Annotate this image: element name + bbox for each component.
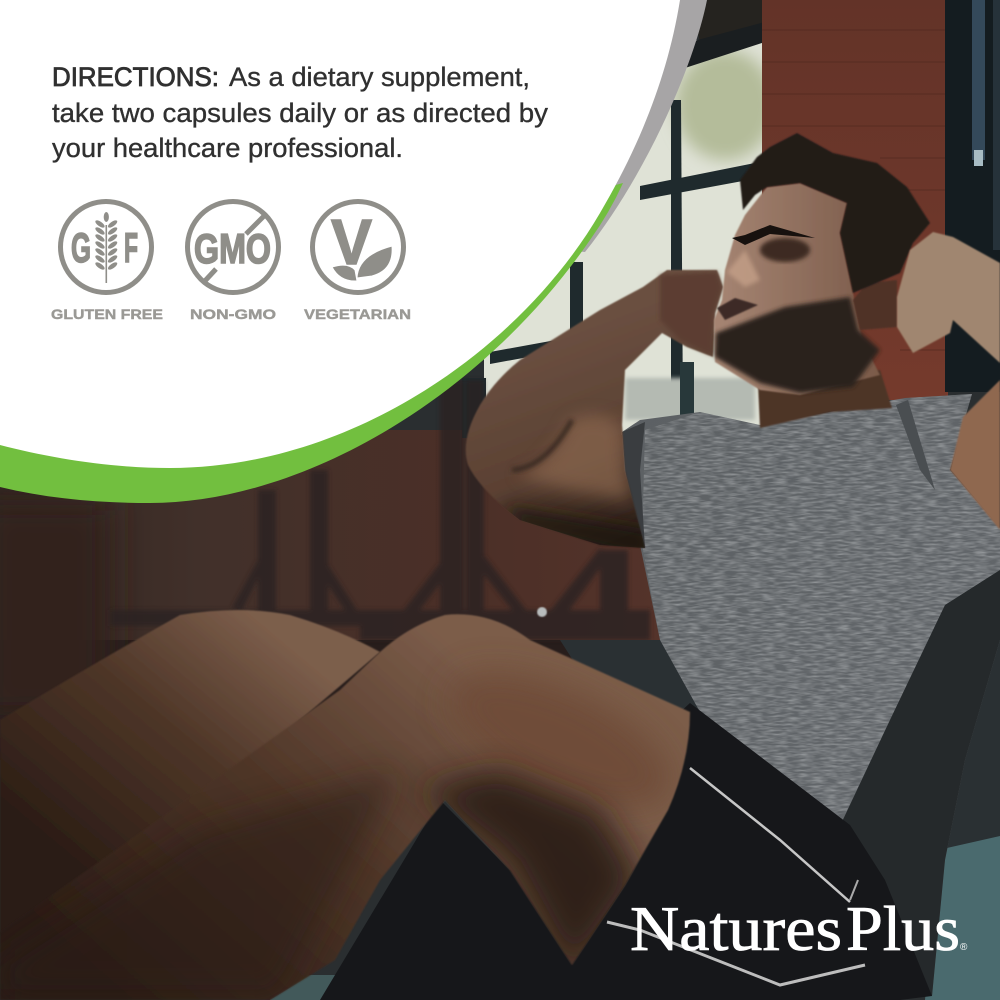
front leg: [0, 614, 690, 1000]
man: shirt: [622, 394, 1000, 996]
icon: gluten free: [60, 202, 152, 292]
man: right hand and forearm: [897, 232, 1000, 363]
directions text: take two capsules daily or as directed by: [52, 98, 549, 128]
man: ear: [853, 280, 897, 330]
icon: gluten free: F: [124, 224, 138, 271]
icon: vegetarian: [312, 202, 404, 292]
icon labels: VEGETARIAN: [304, 307, 411, 322]
directions text: your healthcare professional.: [52, 133, 403, 163]
shorts: [320, 703, 932, 1000]
icon: non-gmo: [188, 202, 278, 292]
icon: gluten free: G: [71, 224, 91, 271]
logo: NaturesPlus: [630, 893, 968, 964]
icon: non-gmo: GMO: [194, 225, 271, 272]
gym rig: [110, 380, 650, 640]
logo: NaturesPlus: ®: [960, 942, 968, 953]
brick wall: [762, 0, 948, 400]
directions text: DIRECTIONS:: [52, 62, 219, 92]
logo: NaturesPlus: Plus: [846, 893, 960, 964]
icon labels: [51, 307, 411, 322]
window: [484, 40, 772, 435]
man: hair: [740, 133, 930, 293]
directions text: [52, 62, 549, 163]
icon labels: GLUTEN FREE: [51, 307, 163, 322]
logo: NaturesPlus: Natures: [630, 893, 842, 964]
icon labels: NON-GMO: [190, 307, 276, 322]
directions text: As a dietary supplement,: [229, 62, 530, 92]
floor: [560, 640, 1000, 860]
upper frame: [690, 0, 765, 42]
man: left arm: [466, 270, 723, 560]
white circle panel with grey and green rims: [0, 0, 707, 503]
mouth and eyes: [717, 225, 815, 320]
dark right column: [945, 0, 1000, 392]
man: face: [714, 183, 880, 395]
rear thigh: [0, 610, 380, 935]
icon: vegetarian: V: [331, 206, 372, 278]
man: neck: [758, 370, 892, 428]
man: right upper arm: [950, 380, 1000, 530]
man: beard: [715, 297, 880, 393]
